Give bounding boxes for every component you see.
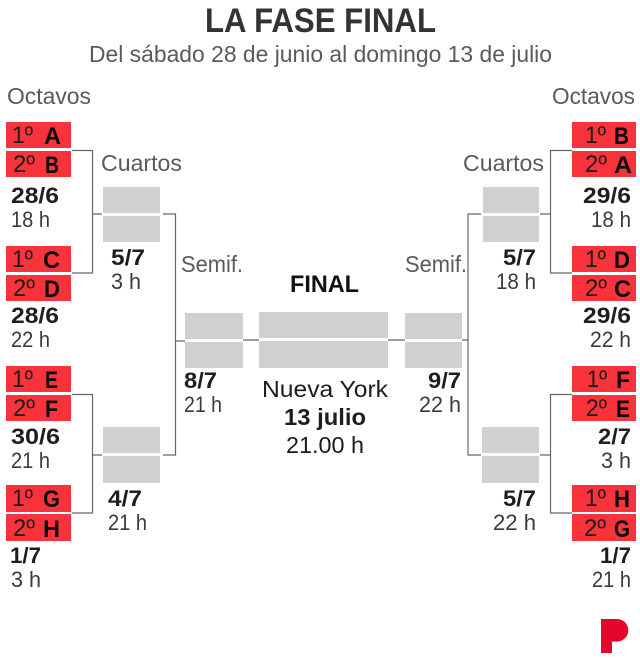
right quarter-final: top <box>483 187 539 294</box>
left round of 16: match 1: B <box>45 152 59 179</box>
right round of 16: match 4 <box>572 485 636 592</box>
right semi-final: 22 h <box>419 392 461 417</box>
left semi-final: 8/7 <box>184 368 217 393</box>
right round of 16: match 1: B <box>614 123 629 150</box>
right quarter-final: top: 5/7 <box>503 245 536 270</box>
right round of 16: match 2: C <box>614 276 631 303</box>
final: Nueva York <box>262 376 389 402</box>
left quarter-final: top: 3 h <box>111 269 141 294</box>
right column heading: Octavos: Octavos <box>552 83 635 109</box>
left round of 16: match 2: 28/6 <box>11 303 59 328</box>
left round of 16: match 4: G <box>43 486 60 513</box>
right quarter-final: bottom: 5/7 <box>503 486 536 511</box>
left semi-final: 21 h <box>184 392 222 417</box>
title: LA FASE FINAL <box>205 2 436 40</box>
left round of 16: match 2: 1º <box>12 246 33 273</box>
right round of 16: match 3 <box>572 366 636 473</box>
left round of 16: match 4: 2º <box>13 515 35 542</box>
left semi-final <box>184 313 243 417</box>
left round of 16: match 2: 2º <box>13 275 35 302</box>
left round of 16: match 4: H <box>43 516 60 543</box>
right quarter-final: bottom <box>482 427 539 535</box>
connector lines <box>72 150 572 513</box>
right round of 16: match 4: H <box>614 486 630 513</box>
left quarter-final: bottom <box>103 427 160 535</box>
final: 13 julio <box>284 404 366 430</box>
left round of 16: match 4: 1º <box>12 485 33 512</box>
right round of 16: match 4: 21 h <box>592 567 631 592</box>
left quarter-final: top <box>103 187 160 294</box>
left round of 16: match 3: 1º <box>12 366 33 393</box>
left quarter-final: top: 5/7 <box>111 245 145 270</box>
left round of 16: match 2: C <box>43 247 60 274</box>
right round of 16: match 2: 1º <box>585 246 606 273</box>
right semi-final: 9/7 <box>428 368 461 393</box>
right round of 16: match 2: 29/6 <box>583 303 631 328</box>
subtitle: Del sábado 28 de junio al domingo 13 de julio <box>89 41 552 67</box>
icon: publisher logo <box>601 619 628 653</box>
right quarter-final: top: 18 h <box>496 269 536 294</box>
right round of 16: match 1: 29/6 <box>583 183 631 208</box>
left round of 16: match 4: 3 h <box>11 567 41 592</box>
right round of 16: match 4: 2º <box>584 515 606 542</box>
final: 21.00 h <box>286 432 364 458</box>
right round of 16: match 3: 2º <box>586 395 607 422</box>
left round of 16: match 2: 22 h <box>11 327 50 352</box>
right heading: Semifinal: Semif. <box>405 251 467 277</box>
left round of 16: match 1: 18 h <box>11 207 50 232</box>
final <box>259 271 389 458</box>
right round of 16: match 4: 1º <box>585 485 606 512</box>
left round of 16: match 3: F <box>45 396 58 423</box>
right semi-final <box>405 313 462 417</box>
left round of 16: match 3: 30/6 <box>11 424 60 449</box>
left heading: Semifinal: Semif. <box>181 251 243 277</box>
right round of 16: match 3: F <box>616 367 630 394</box>
right round of 16: match 2: D <box>614 247 630 274</box>
right round of 16: match 3: E <box>616 396 630 423</box>
right round of 16: match 2 <box>572 246 636 352</box>
right round of 16: match 4: 1/7 <box>600 543 631 568</box>
right round of 16: match 1: 1º <box>585 122 606 149</box>
left round of 16: match 3: 21 h <box>11 448 50 473</box>
left round of 16: match 1: A <box>44 123 61 150</box>
right heading: Cuartos: Cuartos <box>463 150 544 176</box>
left round of 16: match 1 <box>6 122 71 232</box>
right round of 16: match 3: 2/7 <box>598 424 631 449</box>
right round of 16: match 2: 2º <box>585 275 607 302</box>
left round of 16: match 3 <box>6 366 71 473</box>
right round of 16: match 1: 18 h <box>591 207 631 232</box>
right round of 16: match 4: G <box>614 516 630 543</box>
left round of 16: match 3: E <box>45 367 58 394</box>
right round of 16: match 1: A <box>614 152 632 179</box>
right round of 16: match 2: 22 h <box>590 327 631 352</box>
right quarter-final: bottom: 22 h <box>493 510 536 535</box>
right round of 16: match 1 <box>572 122 636 232</box>
left round of 16: match 2 <box>6 246 71 352</box>
right round of 16: match 3: 1º <box>587 366 607 393</box>
final: FINAL <box>290 271 359 298</box>
left round of 16: match 1: 1º <box>12 122 33 149</box>
left round of 16: match 3: 2º <box>13 395 35 422</box>
left round of 16: match 1: 28/6 <box>11 183 59 208</box>
left round of 16: match 4: 1/7 <box>10 543 41 568</box>
right round of 16: match 1: 2º <box>585 151 607 178</box>
right round of 16: match 3: 3 h <box>601 448 631 473</box>
left round of 16: match 1: 2º <box>13 151 35 178</box>
left round of 16: match 2: D <box>44 276 60 303</box>
left quarter-final: bottom: 21 h <box>108 510 147 535</box>
left column heading: Octavos: Octavos <box>7 83 91 109</box>
left heading: Cuartos: Cuartos <box>101 150 182 176</box>
left quarter-final: bottom: 4/7 <box>108 486 142 511</box>
left round of 16: match 4 <box>6 485 71 592</box>
